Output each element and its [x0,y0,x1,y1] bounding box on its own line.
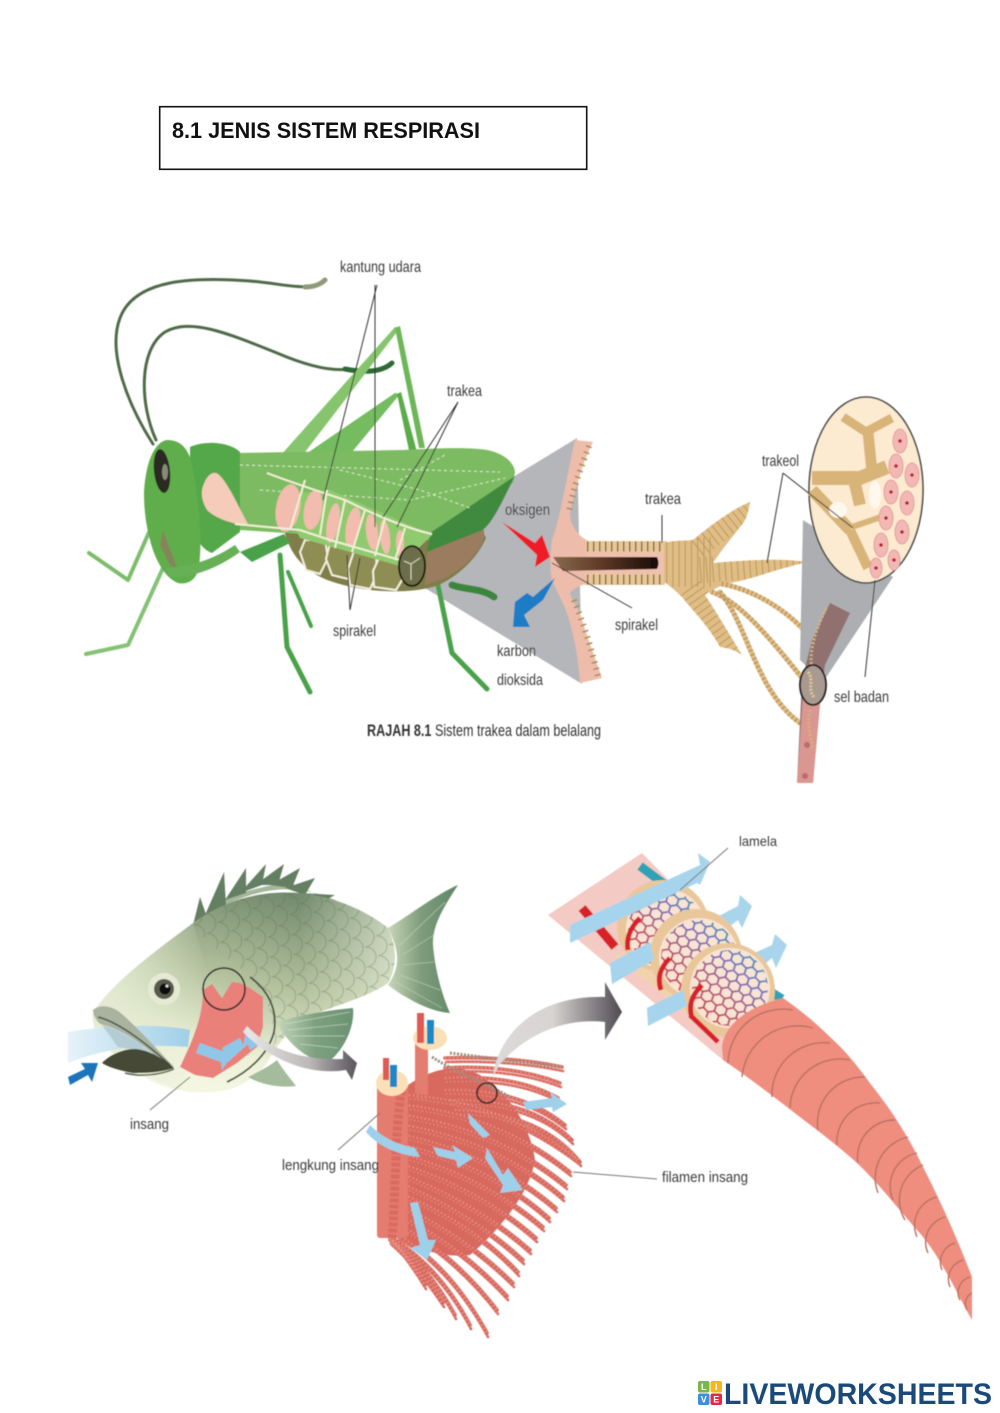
cell nuclei [874,439,914,570]
lamella discs with capillary nets [612,880,775,1037]
tube rib strips [585,541,665,585]
mouthparts [160,530,178,570]
mouth [93,1006,174,1075]
logo tiles [698,1381,722,1405]
rear abdomen brown [425,530,484,585]
gill tissue [180,982,263,1078]
grey magnification funnel from abdomen [420,438,582,684]
fish body [93,892,395,1092]
head highlight [93,923,215,1090]
water through gill arrows [196,1030,262,1070]
labels: grasshopper: spirakel [615,617,658,634]
tracheole branches in circle [812,417,892,568]
arrow: oxygen in [502,522,550,567]
labels: fish: lengkung insang [282,1157,379,1174]
labels: fish: filamen insang [662,1169,748,1186]
abdomen [284,530,486,591]
hind legs behind body [280,326,427,535]
grey arrow to lamella detail [493,982,622,1077]
front and mid legs [86,530,494,692]
rear arch [415,1040,428,1100]
labels: grasshopper [333,259,889,706]
filament mass [400,1068,535,1256]
logo tiles: I [715,1382,717,1392]
labels: fish [130,833,777,1186]
small magnifier circle on tissue [800,665,826,705]
thin trachea branches [712,584,804,723]
labels: grasshopper: sel badan [834,689,889,706]
fish eye [148,973,180,1005]
gill arches and filaments [376,1013,581,1337]
antennae [116,279,392,444]
logo wordmark: LIVEWORKSHEETS [724,1378,992,1411]
trachea tube [585,541,672,585]
grey arrow from fish to gill [243,1026,357,1080]
filament magnifier circle [477,1083,497,1103]
wall ribs [569,446,598,676]
labels: grasshopper: spirakel [333,623,376,640]
logo: liveworksheets [698,1378,992,1411]
vessels [582,866,782,999]
air sacs [272,482,404,556]
labels: grasshopper: trakea [447,383,482,400]
pink lamella plate [548,853,783,1060]
front arch [377,1085,408,1238]
pink wall of body surface [550,440,602,683]
eye [152,448,172,494]
tail fin [388,885,458,1013]
labels: grasshopper: trakea [645,491,681,508]
labels: grasshopper: trakeol [762,453,799,470]
flow bands over lamellae [570,865,700,1026]
logo tiles: L [701,1382,707,1392]
filament ribs [728,1009,972,1310]
dotted lamellae strip [432,1053,560,1097]
thorax pink air sac [202,473,248,524]
logo tiles: V [701,1394,707,1404]
disc 1 [617,880,709,972]
labels: grasshopper: dioksida [497,672,543,689]
labels: fish: lamela [739,833,777,849]
thin branch ribs [712,584,804,723]
funnel to magnified cells [800,520,893,682]
magnifier circle on abdomen [399,546,425,586]
diagram: grasshopper tracheal system [86,259,923,783]
wing veins [240,455,505,508]
dorsal spines [193,864,368,925]
trachea branching trunk [660,500,808,723]
abdomen interior light green [280,490,432,566]
water current into mouth [68,1026,190,1063]
trunk ribs [666,502,800,654]
arrow: carbon dioxide out [513,578,555,627]
spiracle cells [300,540,404,590]
ventral fin [248,1060,296,1087]
fish scales [193,892,395,1055]
leader lines: fish [150,848,728,1179]
disc 3 [681,943,775,1037]
flow arrow heads behind lamellae [697,853,787,968]
diagram: fish gills [68,833,972,1337]
body tissue column [797,603,850,783]
labels: grasshopper: karbon [497,643,536,660]
filaments [390,1058,580,1333]
tapered gill filament [722,998,972,1320]
wing dark fold [427,476,515,552]
pectoral fin [277,1008,353,1063]
magnified circle with body cells [809,397,923,583]
labels: fish: insang [130,1116,169,1133]
gill cover curve [227,977,275,1082]
leader lines: grasshopper [323,285,875,677]
rear body highlight [300,893,395,1016]
head and thorax [144,440,290,583]
logo tiles: E [713,1394,719,1404]
fish magnifier circle [203,968,245,1010]
labels: grasshopper: kantung udara [340,259,421,276]
body cells [870,429,919,578]
heading box [160,107,587,169]
inflow arrow [68,1063,98,1085]
red artery entering lamella [628,918,718,1042]
spiracle tube interior [553,557,658,571]
dorsal fin [193,864,368,925]
labels: grasshopper: oksigen [505,502,550,519]
wing [237,448,515,540]
heading text: 8.1 JENIS SISTEM RESPIRASI [172,118,480,143]
cream tracheae lines [235,473,432,560]
disc 2 [650,909,742,1001]
water flow arrows in gills [366,1092,567,1260]
figure caption: RAJAH 8.1 Sistem trakea dalam belalang [367,721,601,740]
